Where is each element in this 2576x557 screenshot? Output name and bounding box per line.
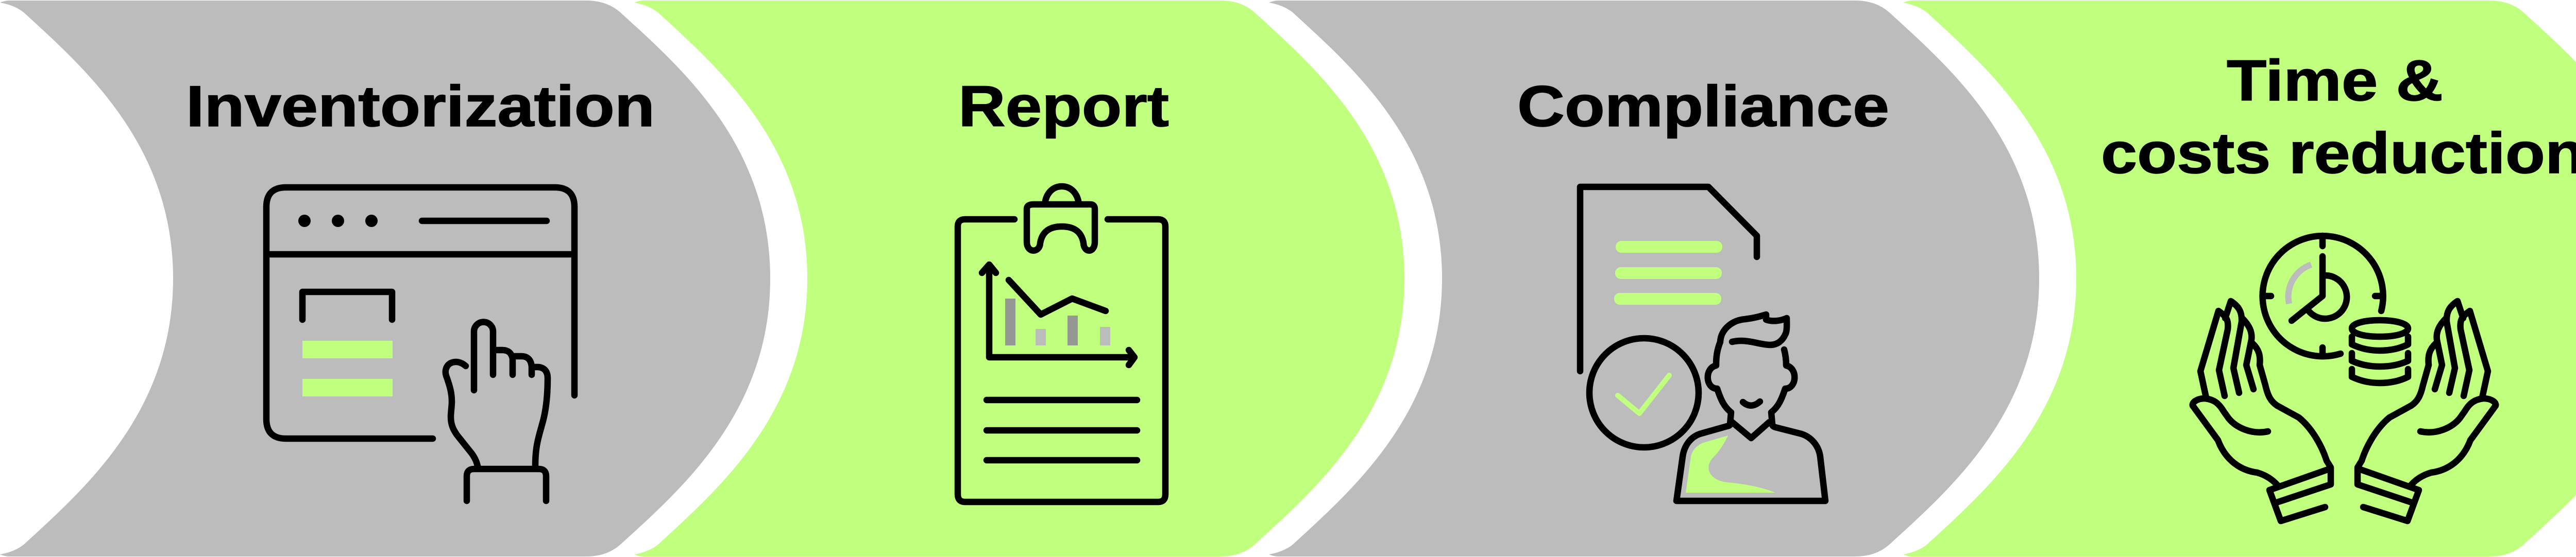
panel: Report — [634, 1, 1404, 556]
heading: Inventorization: Inventorization — [186, 74, 655, 138]
clock face — [2263, 236, 2383, 356]
icon: clipboard report with chart — [958, 186, 1165, 502]
heading: Compliance: Compliance — [1517, 74, 1889, 138]
heading: Report: Report — [958, 74, 1169, 138]
heading: Time & costs reduction: costs reduction — [2101, 121, 2576, 185]
heading: Time & costs reduction — [2101, 48, 2576, 185]
report text lines — [987, 400, 1137, 460]
green check mark — [1618, 375, 1669, 413]
chart axes and arrows — [982, 265, 1134, 365]
left hand — [2193, 301, 2331, 521]
chart trend line — [1009, 280, 1106, 315]
panel: Time & costs reduction — [1903, 1, 2576, 556]
icon: hands holding clock and coins — [2193, 236, 2496, 521]
green form fields — [302, 341, 393, 396]
chevron background: grey — [0, 1, 770, 556]
icon: browser window with pointing hand — [266, 187, 574, 501]
browser window frame — [266, 187, 574, 439]
check circle — [1589, 338, 1699, 447]
panel: Inventorization — [0, 1, 770, 556]
browser window dots — [298, 215, 378, 227]
green document lines — [1614, 241, 1722, 305]
panel: Compliance — [1269, 1, 2039, 556]
clipboard clip — [1027, 186, 1095, 251]
form bracket — [302, 292, 392, 320]
chevron background: grey — [1269, 1, 2039, 556]
pointing hand — [446, 322, 548, 501]
chevron background: green — [634, 1, 1404, 556]
document outline — [1580, 187, 1757, 371]
icon: document, check mark and person — [1580, 187, 1825, 501]
grey clock arc — [2289, 265, 2311, 304]
coin stack — [2352, 320, 2408, 383]
heading: Time & costs reduction: Time & — [2227, 48, 2443, 113]
chevron background: green — [1903, 1, 2576, 556]
person outline — [1676, 315, 1825, 501]
clipboard board — [958, 219, 1165, 502]
clock hands — [2292, 256, 2347, 321]
right hand — [2358, 301, 2496, 521]
green shirt highlight — [1686, 436, 1775, 493]
chart bars — [1005, 299, 1110, 345]
